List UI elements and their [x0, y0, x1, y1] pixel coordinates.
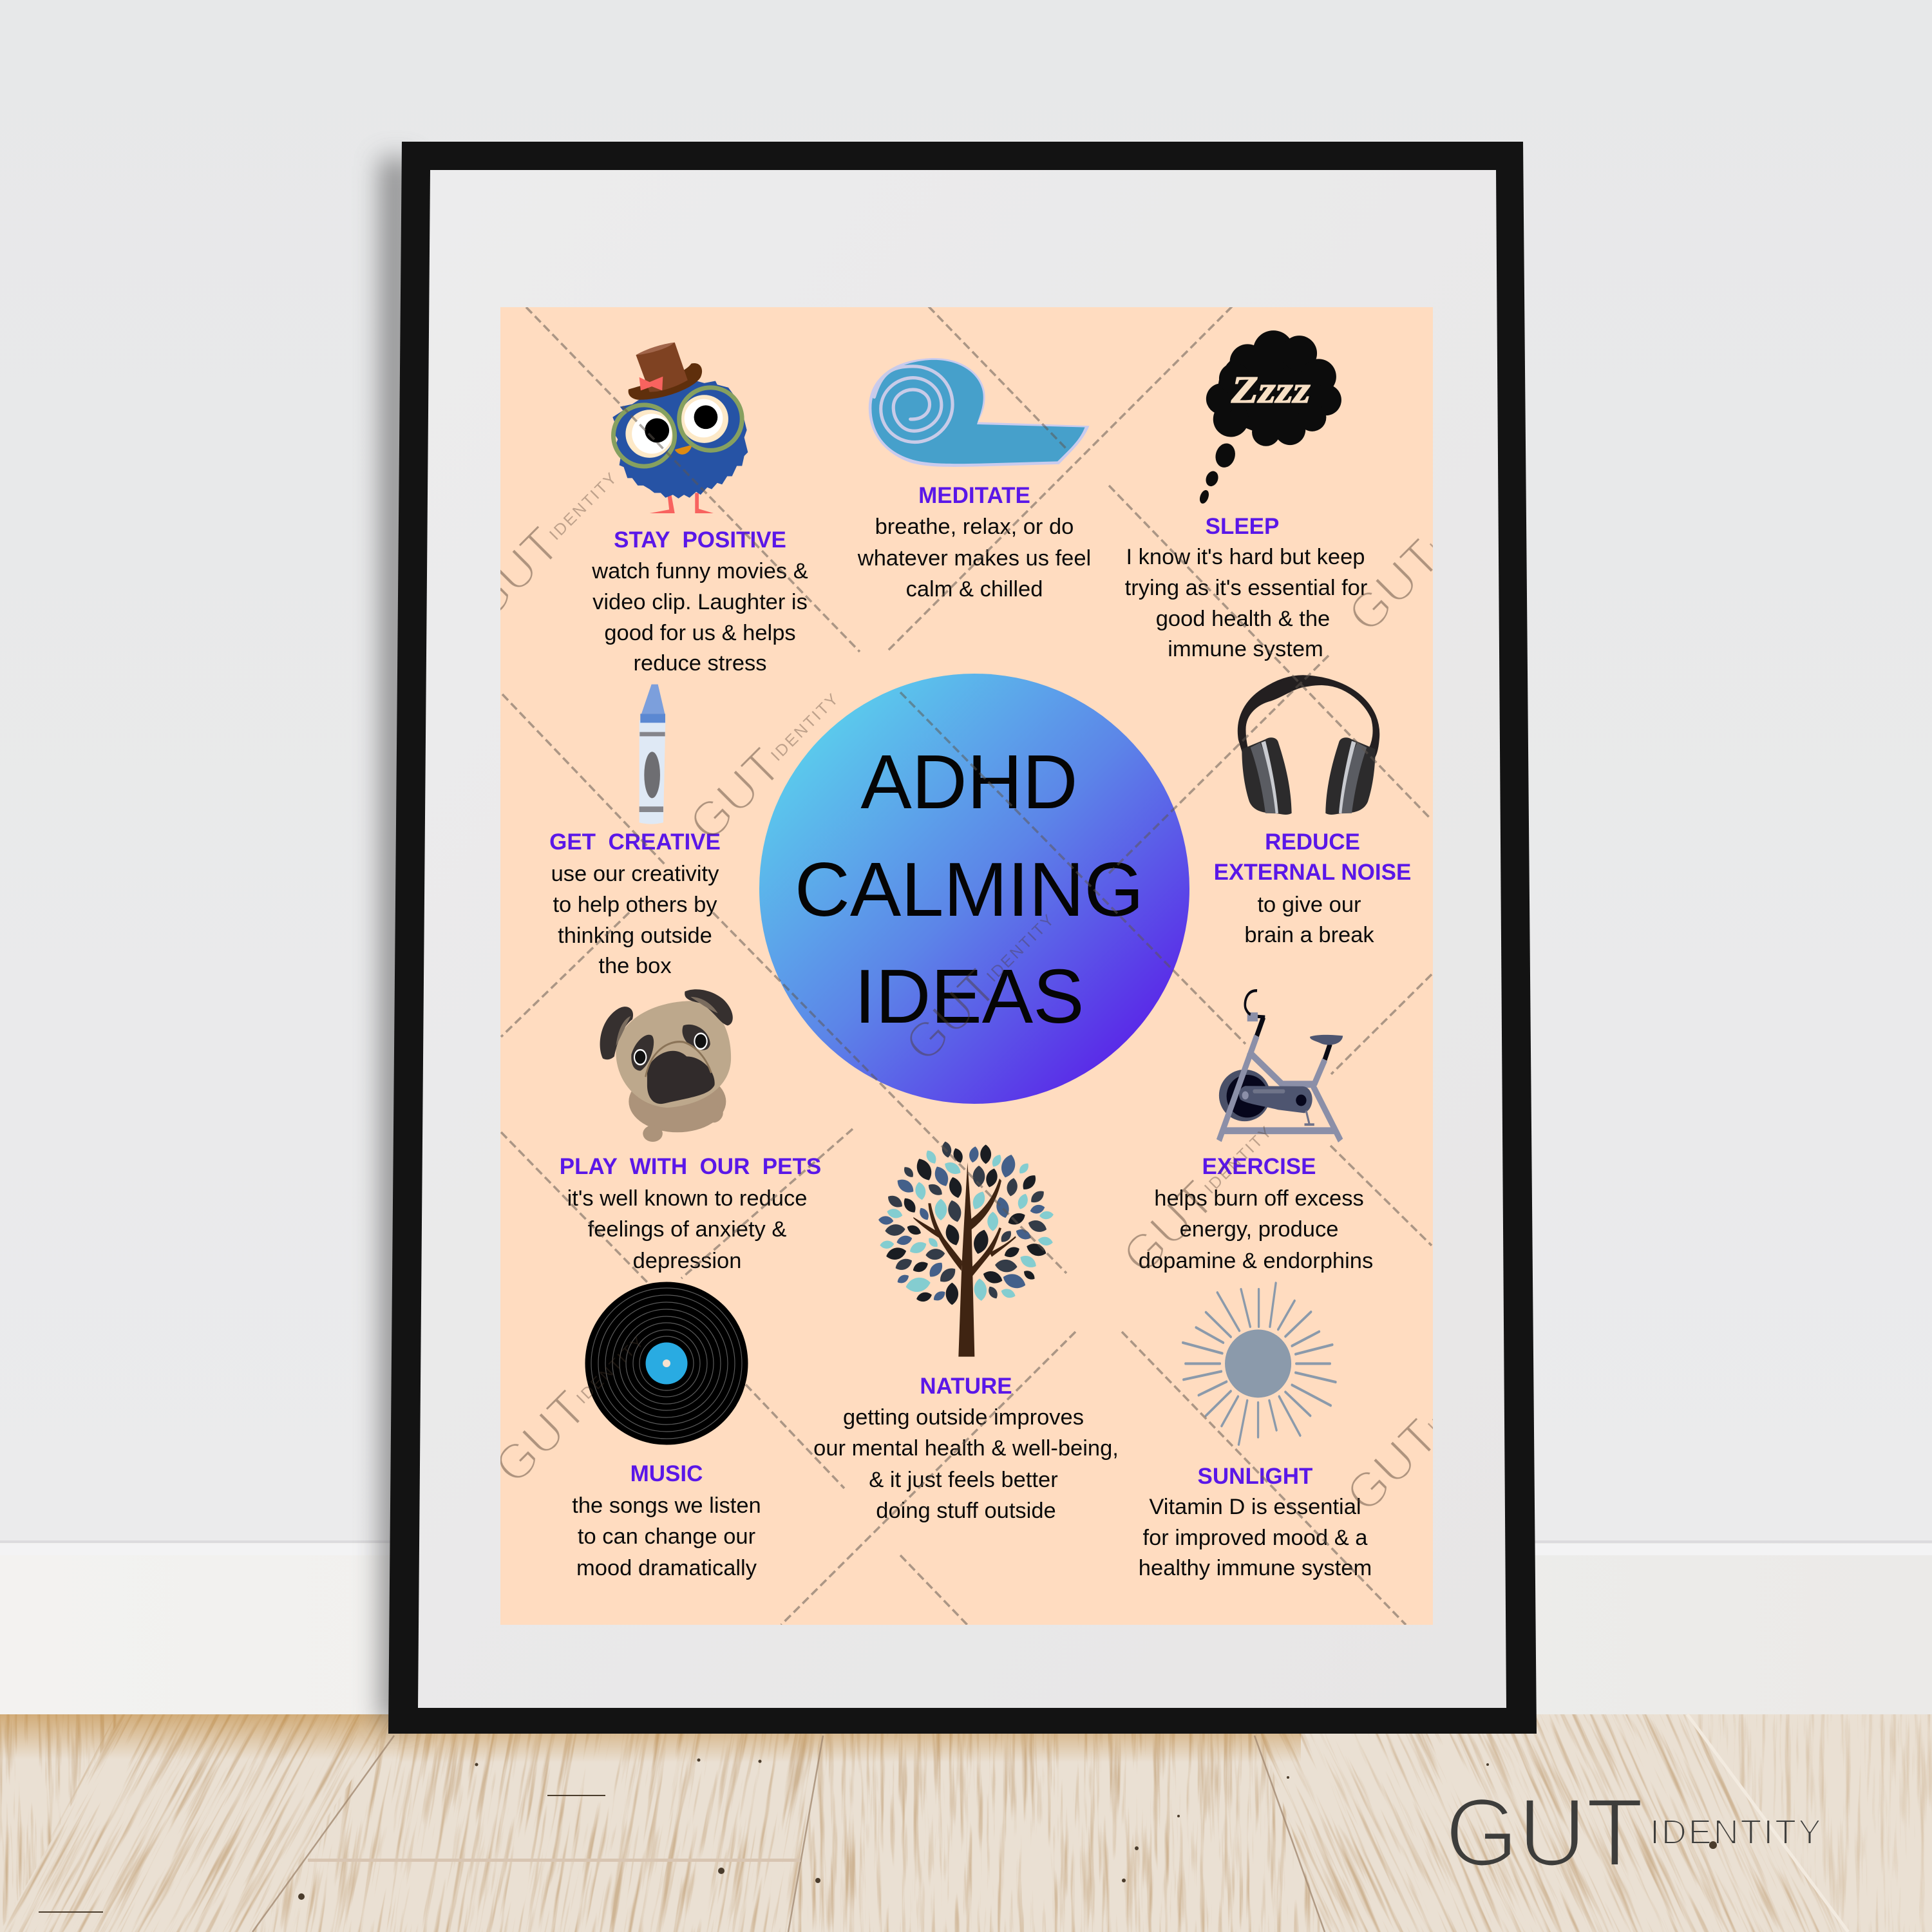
text: exercise: helps burn off excess: [1154, 1186, 1364, 1211]
watermark overlay: dashed lines and repeated logo: IDENTITY: [768, 689, 843, 764]
watermark overlay: dashed lines and repeated logo: IDENTITY: [1201, 1122, 1276, 1197]
text: stay positive: reduce stress: [633, 651, 767, 676]
text: get creative: use our creativity: [551, 862, 719, 886]
text: stay positive: STAY POSITIVE: [614, 527, 786, 553]
text: sleep: I know it's hard but keep: [1126, 545, 1365, 569]
watermark overlay: dashed lines and repeated logo: GUT: [1334, 1408, 1449, 1523]
text: play with our pets: [560, 1154, 821, 1273]
text: meditate: MEDITATE: [918, 483, 1030, 508]
watermark overlay: dashed lines and repeated logo: [500, 307, 1433, 1625]
text: play with our pets: feelings of anxiety &: [588, 1217, 786, 1242]
text: exercise: [1139, 1154, 1373, 1273]
text: reduce external noise: brain a break: [1244, 923, 1374, 947]
frame: white mat: [418, 170, 1506, 1708]
text: reduce external noise: EXTERNAL NOISE: [1214, 860, 1411, 885]
icon: sun: [1183, 1283, 1336, 1444]
text: nature: getting outside improves: [843, 1405, 1084, 1430]
text: sleep: good health & the: [1156, 607, 1330, 631]
text: reduce external noise: [1214, 829, 1411, 947]
watermark overlay: dashed lines and repeated logo: IDENTITY: [1426, 480, 1502, 556]
frame shadow: [380, 158, 412, 1723]
text: music: to can change our: [578, 1524, 755, 1549]
watermark overlay: dashed lines and repeated logo: IDENTITY: [983, 910, 1059, 985]
text: sunlight: [1139, 1464, 1372, 1580]
text: music: mood dramatically: [576, 1556, 757, 1580]
title: [795, 739, 1144, 1039]
text: sleep: immune system: [1168, 637, 1323, 661]
text: sleep: trying as it's essential for: [1125, 576, 1367, 600]
watermark overlay: dashed lines and repeated logo: GUT: [677, 737, 792, 852]
watermark overlay: dashed lines and repeated logo: GUT: [1111, 1170, 1226, 1285]
icon: pug: [600, 989, 733, 1142]
text: sunlight: Vitamin D is essential: [1149, 1495, 1361, 1519]
background: wall: [0, 0, 1932, 1543]
text: stay positive: [591, 527, 808, 676]
watermark overlay: dashed lines and repeated logo: GUT: [456, 516, 571, 631]
icon: crayon: [639, 685, 665, 824]
text: get creative: GET CREATIVE: [549, 829, 721, 855]
text: reduce external noise: REDUCE: [1265, 829, 1360, 855]
text: music: [572, 1461, 761, 1580]
background: skirting board: [0, 1540, 1932, 1716]
text: get creative: [549, 829, 721, 978]
watermark overlay: dashed lines and repeated logo: GUT: [1336, 528, 1451, 643]
text: sleep: [1125, 514, 1367, 661]
central circle with title: [759, 674, 1189, 1104]
text: stay positive: video clip. Laughter is: [592, 590, 808, 614]
text: reduce external noise: to give our: [1257, 893, 1361, 917]
title: CALMING: [795, 847, 1144, 933]
text: nature: NATURE: [920, 1374, 1012, 1399]
watermark overlay: dashed lines and repeated logo: IDENTITY: [573, 1332, 649, 1407]
logo: GUT IDENTITY: GUT: [1445, 1778, 1643, 1886]
text: stay positive: watch funny movies &: [591, 559, 808, 583]
title: ADHD: [860, 739, 1078, 825]
text: nature: & it just feels better: [869, 1468, 1058, 1492]
icon: vinyl record: [585, 1282, 748, 1445]
icon: yoga mat: [869, 358, 1089, 467]
frame: black outer: [388, 142, 1537, 1734]
title: IDEAS: [854, 954, 1084, 1039]
text: get creative: the box: [598, 954, 672, 978]
watermark overlay: dashed lines and repeated logo: GUT: [893, 958, 1008, 1073]
text: exercise: dopamine & endorphins: [1139, 1249, 1373, 1273]
icon: sleep thought bubble: [1198, 330, 1341, 505]
text: music: the songs we listen: [572, 1493, 761, 1518]
text: meditate: whatever makes us feel: [857, 546, 1091, 571]
watermark overlay: dashed lines and repeated logo: IDENTITY: [1425, 1360, 1500, 1435]
watermark overlay: dashed lines and repeated logo: GUT: [483, 1379, 598, 1495]
text: play with our pets: it's well known to reduce: [567, 1186, 807, 1211]
text: exercise: EXERCISE: [1202, 1154, 1316, 1179]
text: music: MUSIC: [630, 1461, 703, 1486]
watermark overlay: dashed lines and repeated logo: IDENTITY: [546, 468, 621, 544]
icon: tree: [878, 1141, 1054, 1357]
icon: owl: [612, 343, 748, 513]
text: meditate: calm & chilled: [906, 577, 1043, 601]
text: nature: [813, 1374, 1119, 1523]
text: get creative: thinking outside: [558, 923, 712, 948]
text: sunlight: SUNLIGHT: [1198, 1464, 1312, 1489]
icon: exercise bike: [1219, 990, 1343, 1141]
logo: GUT IDENTITY: [1445, 1778, 1821, 1886]
text: sunlight: healthy immune system: [1139, 1556, 1372, 1580]
text: exercise: energy, produce: [1180, 1217, 1338, 1242]
text: meditate: [857, 483, 1091, 601]
text: sunlight: for improved mood & a: [1142, 1526, 1368, 1550]
text: nature: our mental health & well-being,: [813, 1436, 1119, 1461]
icon: headphones: [1238, 676, 1379, 815]
text: get creative: to help others by: [553, 893, 717, 917]
icon: sleep thought bubble: Zzzz: [1231, 368, 1311, 411]
text: sleep: SLEEP: [1206, 514, 1279, 539]
background: wooden floor: [0, 1714, 1932, 1932]
text: meditate: breathe, relax, or do: [875, 515, 1074, 539]
logo: GUT IDENTITY: IDENTITY: [1650, 1813, 1821, 1852]
text: play with our pets: depression: [633, 1249, 741, 1273]
text: stay positive: good for us & helps: [604, 621, 796, 645]
poster panel: peach background: [500, 307, 1433, 1625]
text: nature: doing stuff outside: [876, 1499, 1056, 1523]
text: play with our pets: PLAY WITH OUR PETS: [560, 1154, 821, 1179]
